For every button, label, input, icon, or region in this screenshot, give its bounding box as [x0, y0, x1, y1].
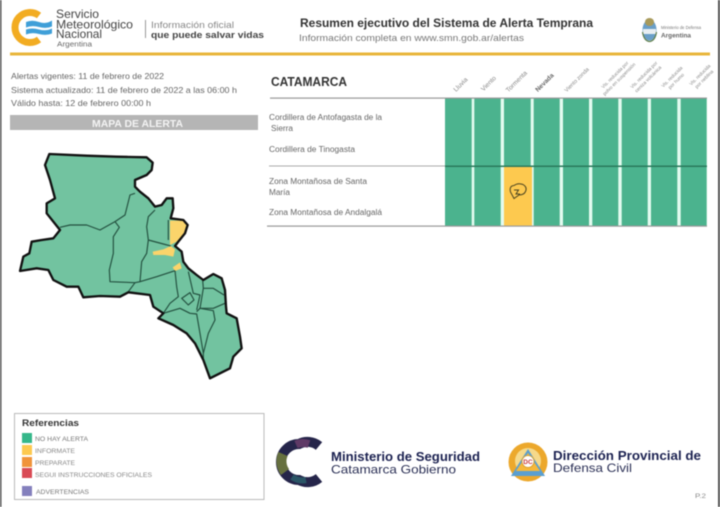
column headers: Vis. reducida por [629, 60, 659, 90]
alert dates [11, 71, 237, 108]
alert dates: Sistema actualizado: 11 de febrero de 2022 a las 06:00 h [11, 85, 237, 95]
ministry of security text: Ministerio de Seguridad [331, 450, 480, 464]
map heading: MAPA DE ALERTA [92, 119, 183, 130]
legend item: inform [22, 445, 75, 455]
icon: Defensa Civil logo: DC [523, 459, 533, 466]
SMN name: Argentina [57, 42, 92, 48]
tagline: Información oficial [151, 20, 234, 31]
column headers: Tormenta [505, 70, 529, 94]
ministry label: Argentina [661, 32, 691, 40]
alert dates: Alertas vigentes: 11 de febrero de 2022 [11, 71, 164, 81]
column headers: Vis. reducida por [600, 60, 630, 90]
column headers: por neblina [694, 69, 715, 90]
SMN name [56, 7, 133, 48]
legend item: prepare: PREPARATE [35, 461, 75, 467]
zone group 1: Cordillera de Tinogasta [269, 145, 356, 154]
icon: Defensa Civil logo [508, 442, 548, 482]
zone group 1 [269, 113, 383, 154]
column headers: Lluvia [452, 76, 470, 93]
yellow alert cell: Tormenta [504, 167, 532, 226]
alert map of Catamarca [20, 154, 242, 378]
ministry of security text: Catamarca Gobierno [331, 462, 456, 476]
icon: Catamarca Gobierno logo [281, 442, 319, 482]
ministry label: Ministerio de Defensa [661, 25, 701, 30]
civil defense text [553, 449, 701, 475]
panel: province alert table [267, 57, 717, 227]
SMN name: Servicio [56, 7, 99, 21]
legend [14, 414, 264, 500]
legend item: warnings [22, 486, 89, 496]
legend item: no alert: NO HAY ALERTA [35, 437, 88, 443]
legend item: official instructions [22, 468, 152, 479]
legend item: no alert [22, 433, 88, 443]
legend item: warnings: ADVERTENCIAS [36, 490, 89, 496]
legend title: Referencias [22, 418, 79, 428]
zone group 2: María [269, 188, 291, 197]
alert grid [445, 98, 707, 226]
zone group 1: Cordillera de Antofagasta de la [269, 113, 383, 122]
title: Resumen ejecutivo del Sistema de Alerta Temprana [300, 18, 594, 30]
column headers: Vis. reducida [660, 65, 684, 89]
subtitle: Información completa en www.smn.gob.ar/alertas [299, 33, 524, 44]
zone group 2 [269, 177, 383, 217]
SMN name: Meteorológico [56, 18, 133, 32]
header [15, 7, 701, 48]
zone group 1: Sierra [271, 124, 294, 133]
zone group 2: Zona Montañosa de Andalgalá [269, 208, 383, 217]
legend item: official instructions: SEGUI INSTRUCCIONES OFICIALES [35, 473, 152, 479]
province name: CATAMARCA [271, 75, 347, 89]
map heading [10, 115, 258, 130]
legend item: prepare [22, 457, 75, 467]
column headers: Viento zonda [564, 66, 591, 94]
column headers: polvo en suspensión [602, 62, 637, 97]
SMN name: Nacional [56, 27, 102, 41]
civil defense text: Dirección Provincial de [553, 449, 701, 463]
zone group 2: Zona Montañosa de Santa [269, 177, 368, 186]
icon: storm cloud [510, 184, 526, 198]
ministry of security text [331, 450, 480, 476]
column headers: por humo [667, 72, 686, 91]
civil defense text: Defensa Civil [553, 461, 632, 475]
legend item: inform: INFORMATE [35, 449, 75, 455]
icon: national shield [642, 18, 656, 42]
tagline: que puede salvar vidas [151, 30, 264, 41]
column headers: Vis. reducida [688, 63, 712, 87]
column headers: Viento [480, 75, 498, 93]
ministry label [661, 25, 701, 40]
column headers [452, 57, 717, 97]
column headers: ceniza volcánica [634, 65, 663, 94]
tagline [151, 20, 264, 41]
page number: P.2 [695, 493, 706, 500]
icon: SMN logo [15, 13, 52, 43]
alert dates: Válido hasta: 12 de febrero 00:00 h [11, 98, 151, 108]
column headers: Nevada [534, 72, 556, 94]
